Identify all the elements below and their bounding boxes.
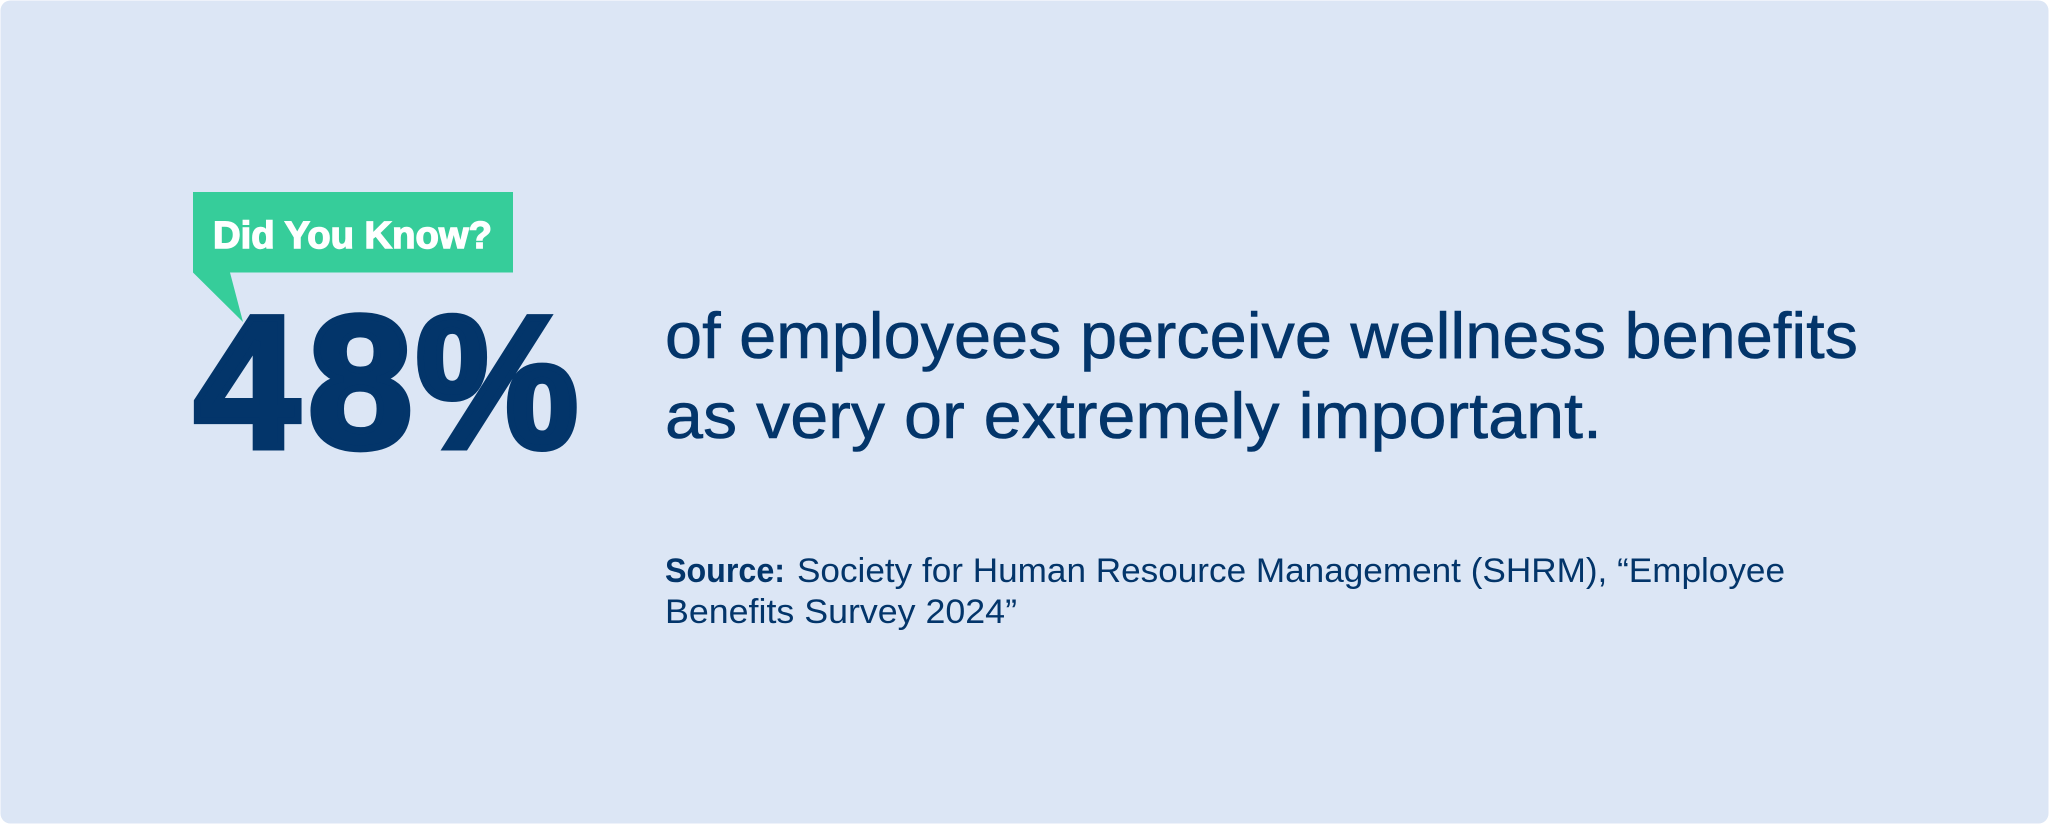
percent sign: % — [416, 277, 578, 488]
source label: Source: — [665, 552, 785, 590]
callout: Did You Know speech bubble — [193, 192, 513, 322]
bubble shape with tail — [193, 192, 513, 322]
digits 48: 48 — [194, 277, 413, 487]
statement line 1: of employees perceive wellness benefits — [665, 299, 1858, 372]
statement line 2: as very or extremely important. — [665, 379, 1602, 452]
source line 2: Benefits Survey 2024” — [665, 593, 1017, 631]
callout heading: Did You Know? — [213, 215, 492, 257]
big statistic: 48% — [194, 277, 578, 488]
statement text — [665, 299, 1858, 452]
source line 1: Society for Human Resource Management (SHRM), “Employee — [797, 552, 1785, 590]
source citation — [665, 552, 1785, 631]
